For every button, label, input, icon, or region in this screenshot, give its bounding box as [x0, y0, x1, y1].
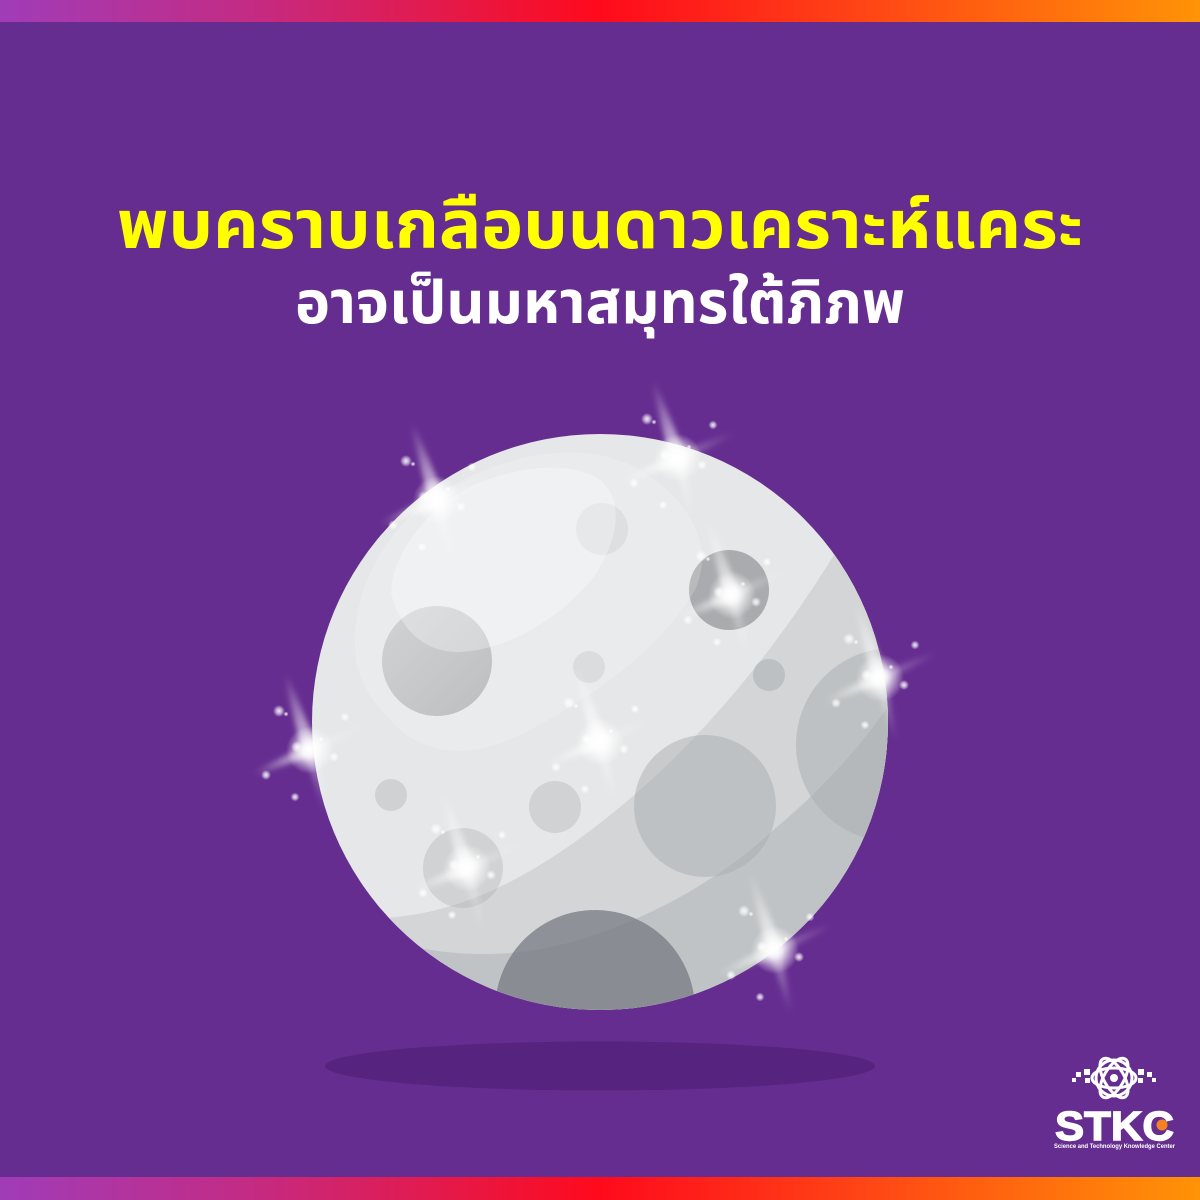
crater: lower middle: [529, 781, 581, 833]
crater: upper right dark: [689, 550, 769, 630]
sparkle: left: [251, 671, 369, 814]
highlight: inner: [402, 503, 616, 652]
sparkle: right: [821, 599, 939, 742]
icon: orange dot: [1156, 1120, 1168, 1130]
bottom gradient bar: [0, 1177, 1200, 1200]
crater: large centre: [634, 735, 776, 877]
top gradient bar: [0, 0, 1200, 22]
crater: middle small: [573, 651, 605, 683]
crater: bottom dark: [496, 910, 694, 1010]
subtitle: อาจเป็นมหาสมุทรใต้ภิภพ: [295, 269, 905, 339]
moon shadow: [325, 1042, 875, 1090]
sparkle: crater: [673, 516, 791, 659]
logo: STKC: [1054, 1054, 1176, 1150]
icon: data squares: [1072, 1069, 1156, 1083]
crater: lower left: [423, 828, 503, 908]
crater: upper left: [382, 606, 492, 716]
sparkle: top left: [378, 421, 496, 564]
sparkles: [251, 379, 939, 1014]
wordmark: STKC: [1055, 1103, 1174, 1149]
sparkle: bottom right: [716, 871, 834, 1014]
crater: left small: [375, 779, 407, 811]
sparkle: centre: [541, 663, 659, 806]
highlight: outer: [382, 561, 702, 716]
title: พบคราบเกลือบนดาวเคราะห์แคระ: [117, 187, 1083, 263]
crater: right small: [753, 659, 785, 691]
moon body: [312, 434, 888, 1010]
moon: [312, 434, 888, 1010]
icon: atom: [1092, 1054, 1136, 1102]
crater: top small: [576, 503, 628, 555]
tagline: Science and Technology Knowledge Center: [1054, 1144, 1176, 1150]
sparkle: lower left crater: [408, 789, 526, 932]
sparkle: top: [619, 379, 737, 522]
moon shading bands: [375, 468, 888, 1010]
crater: far right: [796, 649, 888, 838]
